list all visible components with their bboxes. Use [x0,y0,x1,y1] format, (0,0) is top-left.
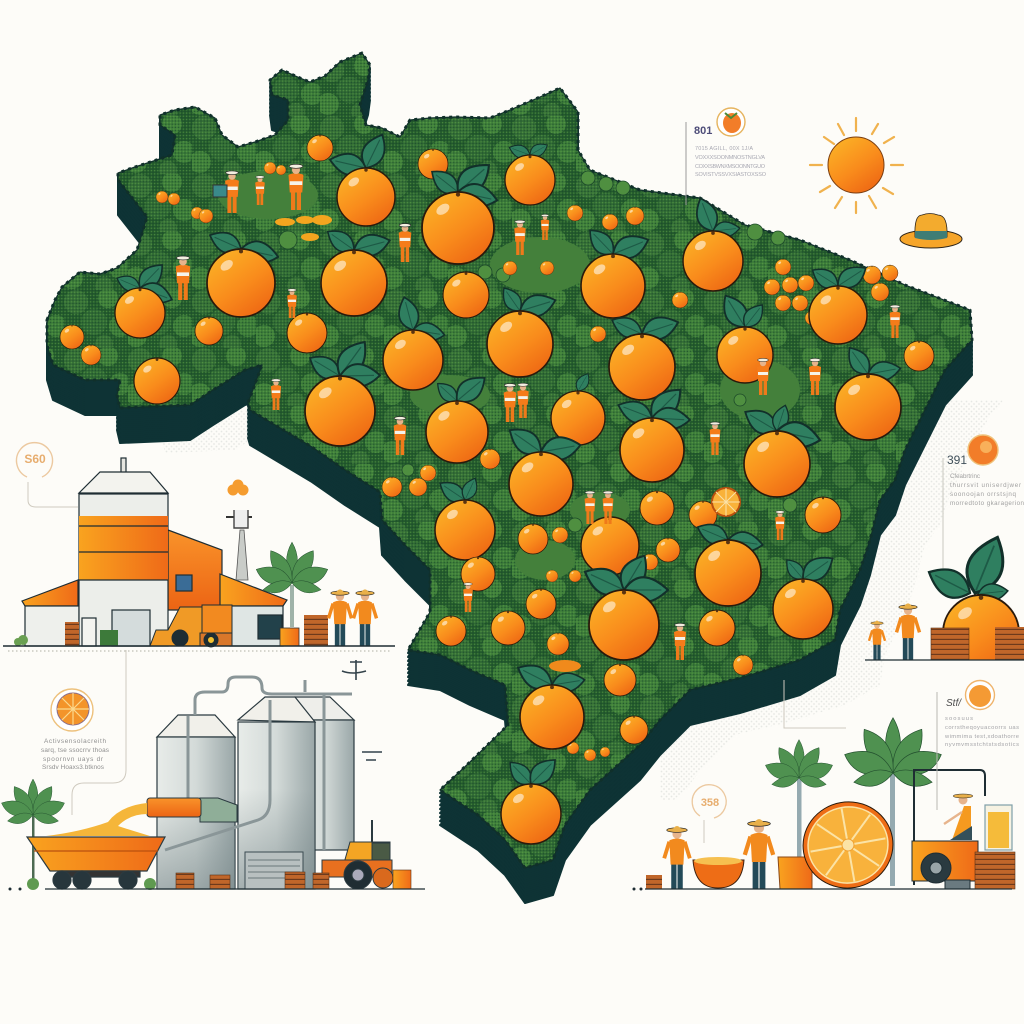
orange 29 with leaves [513,658,586,749]
orange 26 with leaves [694,519,764,606]
workers [869,603,920,660]
roller door [245,852,303,889]
orange 6 with leaves [206,227,280,317]
orange 2 with leaves [328,130,395,226]
orange 16 with leaves [716,290,773,383]
yellow tractor [322,820,393,889]
callout: 560 [16,443,78,507]
orange 23 with leaves [740,403,823,497]
crates [931,627,1024,660]
leader line [685,122,687,205]
cut orange on map [712,488,740,516]
workers [328,589,376,646]
orange 28 with leaves [580,550,668,660]
icon: orange badge [717,108,745,136]
callout text: Activsensolacreith [44,738,106,745]
callout text: spoornvn uays dr [43,756,104,763]
callout text: wimmima test,xdoathorre [944,734,1019,740]
text: soonoojan orrstsjnq [950,491,1017,498]
barrels [176,870,411,889]
halftone shadow [163,400,1002,800]
hopper wagon [27,837,165,889]
orange 13 with leaves [683,195,743,291]
orange truck [150,605,232,647]
orange cloud icon [228,480,248,496]
palm small [2,779,64,886]
juice glass [985,805,1012,850]
orange 19 with leaves [305,335,380,446]
callout heading: Stf/ [946,698,962,709]
central small oranges [436,491,841,675]
leader [942,458,944,570]
orange 17 with leaves [608,312,681,400]
orange chute [147,798,237,822]
value: 391 [947,453,967,467]
left warehouse [22,580,79,646]
orange 21 with leaf [551,371,605,445]
crates [646,852,1015,889]
ground line [8,888,425,890]
callout text: VOXXXSOONMNOSTNGLVA [695,155,765,161]
orange 20 with leaves [426,370,491,463]
callout text: soosuus [945,716,973,722]
callout: 358: 358 [701,797,719,809]
icon: sun [810,118,903,213]
callout: 358 [692,785,726,843]
icon: small birds [342,660,382,760]
callout text: 7015 AGILL, 00X 1J/A [695,146,753,152]
orange 18 with leaves [835,343,902,440]
callout: top right [686,108,767,205]
callout: 391 panel and big orange [865,435,1024,671]
orange 8 [443,272,489,318]
text [950,473,1024,507]
plant pot [778,857,812,889]
bowl of orange [693,857,744,888]
workers on map [176,164,900,660]
orange 3 [418,149,448,179]
orange 4 with leaves [422,156,500,264]
pipes [165,677,352,850]
palm [256,542,328,627]
orange 27 with leaves [773,550,838,639]
empty bracket leader [784,680,846,728]
callout text: Srsdv Hoaxs3.btknos [42,764,104,771]
right orange building [168,530,287,646]
icon: straw hat [900,214,962,248]
scene: juice factory top left [3,443,395,651]
front silo left [157,715,235,889]
callout text: nyvmvmsstchtstsdsotics [945,742,1019,748]
worker standing [745,819,773,889]
front silo right [238,697,315,889]
map extruded side [47,56,972,903]
map top surface [47,53,972,868]
icon: citrus slice [51,689,93,731]
callout: 560: S60 [24,452,46,466]
map of Brazil [47,53,972,903]
ground line [3,646,395,651]
antenna tower [226,510,252,580]
icon: orange badge [968,435,998,465]
small orange clusters [156,162,898,777]
text: thurrsvit uniserdjwer [950,482,1021,489]
orange 25 with leaves [435,475,495,560]
southern oranges [604,664,648,744]
orange 15 [904,341,934,371]
text: Cfeabrtrinc [950,473,980,480]
callout text [944,716,1019,748]
callout text: SOVISTVSSVXSIASTOXSSO [695,172,767,178]
bushes [27,878,156,890]
worker with clipboard [664,826,690,889]
falling pulp [46,803,150,836]
callout text: COXXSBWNXMSOONNTGUO [695,164,766,170]
callout leader [72,650,126,815]
callout value: 801 [694,125,712,137]
orange 14 with leaves [808,260,871,344]
orange 22 with leaves [615,382,691,482]
icon: orange badge [966,680,994,710]
orange 1 [307,135,333,161]
callout text: corrstheqoyuacoorrs uas [945,725,1019,731]
callout text [695,146,767,178]
orange 5 with leaves [505,140,555,205]
text: morredtoto gkaragerion [950,500,1024,507]
crates and bush [14,622,118,646]
giant orange slice [796,795,900,895]
orange 12 with leaves [581,224,652,318]
callout text [41,738,109,771]
back silo [295,697,354,850]
orange 11 with leaves [487,284,558,377]
west oranges [60,313,327,404]
orange 7 with leaves [321,224,392,316]
barrel and crate [280,615,328,646]
ground line [632,888,1012,890]
forklift [912,770,985,889]
palm tree large [845,718,941,886]
callout text: sarq, tse ssocrrv thoas [41,747,109,754]
orange 30 with leaves [501,753,562,844]
orange 10 with leaves [383,295,446,390]
palm tree small [765,740,833,885]
tall silo [79,458,168,646]
orange 9 with leaves [114,259,175,338]
ground line [865,659,1024,661]
big orange [942,594,1020,660]
orange 24 with leaves [504,422,582,516]
green fruit and bushes [279,171,797,532]
forklift driver [944,794,973,840]
leaves [923,531,1013,605]
scene: harvest bottom right [632,680,1019,895]
scene: storage silos bottom left [2,650,425,890]
leader [936,692,938,810]
